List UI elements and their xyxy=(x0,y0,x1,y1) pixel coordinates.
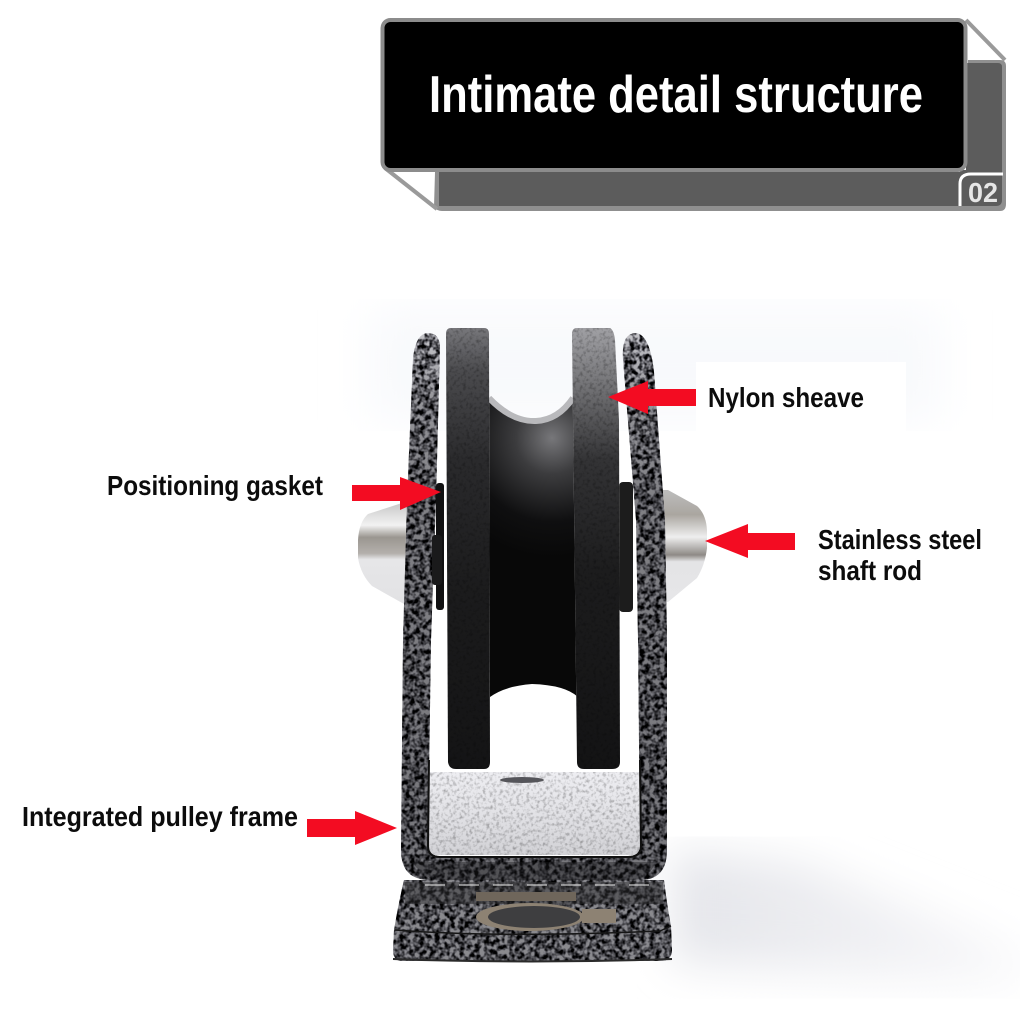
label: integrated pulley frame: Integrated pulley frame xyxy=(22,801,298,832)
arrow: positioning gasket xyxy=(352,477,441,510)
left shaft bolt xyxy=(358,503,412,604)
label: positioning gasket: Positioning gasket xyxy=(107,470,323,501)
page number badge xyxy=(960,174,1003,208)
label: nylon sheave: Nylon sheave xyxy=(708,382,864,413)
inner floor plate xyxy=(428,772,640,855)
right flange xyxy=(572,328,620,769)
page number badge: 02 xyxy=(968,177,998,208)
banner black face xyxy=(382,20,966,170)
arrow: integrated pulley frame xyxy=(307,811,397,845)
fold top right xyxy=(966,20,1005,60)
sheave xyxy=(446,328,620,769)
banner back panel xyxy=(434,60,1006,211)
floor hole xyxy=(500,777,544,783)
arrow: nylon sheave xyxy=(608,381,696,414)
U-shaped frame xyxy=(401,333,667,880)
label: stainless steel shaft rod: Stainless steel xyxy=(818,524,982,555)
title banner xyxy=(382,20,1006,211)
white patch behind Nylon sheave label xyxy=(696,362,906,434)
fold bottom left xyxy=(385,168,437,209)
groove body xyxy=(486,396,578,697)
right gasket xyxy=(619,482,633,612)
bottom frame band shade xyxy=(412,862,656,880)
banner title text: Intimate detail structure xyxy=(429,66,923,124)
arrow: stainless steel shaft rod xyxy=(705,524,795,558)
pulley product xyxy=(358,328,707,962)
background haze behind product xyxy=(370,310,940,420)
groove rim highlight xyxy=(489,398,573,421)
label: stainless steel shaft rod: shaft rod xyxy=(818,555,922,586)
right shaft bolt xyxy=(660,490,707,602)
inner frame edge xyxy=(428,760,641,857)
left flange xyxy=(446,328,490,769)
mounting slot xyxy=(476,903,584,931)
product cast shadow xyxy=(672,850,1020,985)
base plate xyxy=(393,880,672,962)
left gasket xyxy=(432,483,444,610)
